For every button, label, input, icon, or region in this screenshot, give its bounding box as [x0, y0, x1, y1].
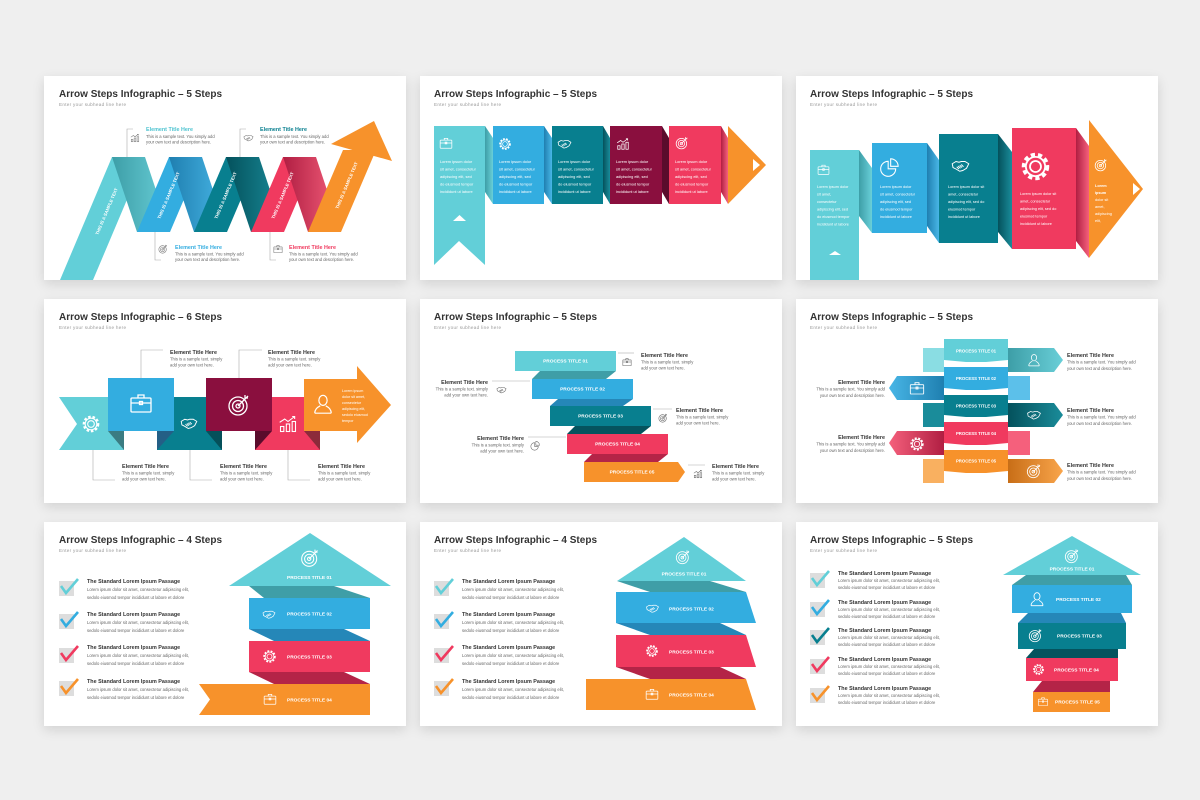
- ribbon steps: sit amet, consectetur: [675, 166, 712, 172]
- title: Arrow Steps Infographic – 5 Steps: [810, 312, 973, 323]
- rising boxes: incididunt ut labore: [1020, 222, 1052, 226]
- title: Arrow Steps Infographic – 5 Steps: [434, 312, 597, 323]
- rising boxes: adipiscing elit, sed do: [1020, 207, 1056, 211]
- checklist: sedolo eiusmod tempor incididunt ut labore et dolore: [838, 614, 936, 619]
- ribbon steps: adipiscing elit, sed: [616, 174, 648, 179]
- checklist: The Standard Lorem Ipsum Passage: [87, 612, 180, 618]
- callouts: add your own text here.: [268, 362, 312, 368]
- callouts: [436, 353, 765, 482]
- callouts: add your own text here.: [712, 476, 756, 482]
- checklist: The Standard Lorem Ipsum Passage: [87, 579, 180, 585]
- callouts: Element Title Here: [318, 464, 365, 470]
- checklist: sedolo eiusmod tempor incididunt ut labore et dolore: [87, 595, 185, 600]
- stacked arrow: PROCESS TITLE 01: [287, 575, 332, 581]
- checklist: Lorem ipsum dolor sit amet, consectetur adipiscing elit,: [87, 653, 189, 658]
- rising boxes: ipsum: [1095, 191, 1107, 195]
- ribbon steps: adipiscing elit, sed: [675, 174, 707, 179]
- six-step arrow: Lorem ipsum: [342, 389, 363, 393]
- stacked slanted arrow: [586, 537, 756, 710]
- ribbon steps: adipiscing elit, sed: [558, 174, 590, 179]
- ribbon steps: Lorem ipsum dolor: [558, 159, 591, 164]
- panel: slide 4 six steps: [44, 299, 406, 503]
- callouts: This is a sample text. You simply add: [1067, 360, 1136, 364]
- callout 3: your own text and description here.: [175, 257, 240, 262]
- callout 4: [270, 232, 358, 262]
- ribbon steps: [434, 126, 766, 265]
- callout 3: [155, 232, 244, 262]
- callouts: your own text and description here.: [820, 393, 885, 398]
- rising boxes: consectetur: [817, 200, 837, 204]
- callouts: This is a sample text. You simply add: [816, 386, 886, 392]
- rising boxes: amet,: [1095, 205, 1104, 209]
- callout 2: Element Title Here: [260, 127, 307, 133]
- callouts: This is a sample text. simply: [170, 356, 223, 362]
- ribbon steps: sit amet, consectetur: [616, 166, 653, 172]
- checklist: Lorem ipsum dolor sit amet, consectetur adipiscing elit,: [462, 587, 564, 592]
- callouts: add your own text here.: [122, 476, 166, 482]
- checklist: The Standard Lorem Ipsum Passage: [462, 679, 555, 685]
- callout 2: [240, 127, 329, 157]
- panel: slide 5 staircase: [420, 299, 782, 503]
- checklist: sedolo eiusmod tempor incididunt ut labore et dolore: [462, 595, 560, 600]
- callouts: This is a sample text. simply: [122, 470, 175, 476]
- pyramid arrow: PROCESS TITLE 01: [1050, 566, 1095, 572]
- panel: slide 3 rising boxes: [796, 76, 1158, 280]
- ribbon steps: adipiscing elit, sed: [499, 174, 531, 179]
- callouts: add your own text here.: [170, 362, 214, 368]
- stacked slanted arrow: PROCESS TITLE 01: [662, 572, 707, 578]
- callouts: add your own text here.: [220, 476, 264, 482]
- title: Arrow Steps Infographic – 6 Steps: [59, 312, 222, 323]
- rising boxes: Lorem ipsum dolor sit: [948, 185, 985, 189]
- rising boxes: eiusmod tempor: [1020, 214, 1048, 218]
- rising boxes: Lorem ipsum dolor: [817, 185, 849, 189]
- callout 2: This is a sample text. You simply add: [260, 134, 329, 139]
- ribbon steps: sit amet, consectetur: [499, 166, 536, 172]
- banners: [889, 339, 1063, 483]
- rising boxes: incididunt ut labore: [948, 215, 980, 219]
- callouts: Element Title Here: [641, 353, 688, 359]
- callouts: This is a sample text. You simply add: [1067, 470, 1136, 474]
- ribbon steps: sit amet, consectetur: [558, 166, 595, 172]
- rising boxes: eiusmod tempor: [948, 208, 976, 212]
- checklist: sedolo eiusmod tempor incididunt ut labore et dolore: [462, 661, 560, 666]
- callouts: This is a sample text. You simply add: [1067, 414, 1136, 420]
- banners: PROCESS TITLE 01: [956, 348, 997, 354]
- checklist: [810, 571, 940, 705]
- stacked arrow: PROCESS TITLE 04: [287, 698, 332, 704]
- ribbon steps: do eiusmod tempor: [616, 182, 650, 186]
- staircase: PROCESS TITLE 03: [578, 414, 623, 420]
- checklist: Lorem ipsum dolor sit amet, consectetur adipiscing elit,: [838, 664, 940, 669]
- panel: slide 1 zigzag arrow: [44, 76, 406, 280]
- subhead: Enter your subhead line here: [59, 548, 126, 553]
- rising boxes: Lorem: [1095, 184, 1107, 188]
- callout 2: your own text and description here.: [260, 140, 325, 144]
- stacked slanted arrow: PROCESS TITLE 03: [669, 650, 714, 656]
- title: Arrow Steps Infographic – 5 Steps: [810, 535, 973, 546]
- rising boxes: sit amet, consectetur: [880, 192, 916, 196]
- rising boxes: adipiscing elit, sed do: [948, 200, 984, 204]
- title: Arrow Steps Infographic – 4 Steps: [59, 535, 222, 546]
- six-step arrow: sedolo eiusmod: [342, 413, 368, 417]
- zigzag arrow: THIS IS A SAMPLE TEXT: [334, 161, 359, 210]
- six-step arrow: [59, 366, 391, 450]
- banners: PROCESS TITLE 05: [956, 458, 997, 464]
- subhead: Enter your subhead line here: [434, 102, 501, 107]
- subhead: Enter your subhead line here: [810, 548, 877, 553]
- checklist: Lorem ipsum dolor sit amet, consectetur adipiscing elit,: [87, 620, 189, 625]
- callouts: This is a sample text. simply: [712, 470, 765, 476]
- rising boxes: amet, consectetur: [1020, 200, 1051, 204]
- checklist: The Standard Lorem Ipsum Passage: [838, 686, 931, 692]
- ribbon steps: Lorem ipsum dolor: [616, 159, 649, 164]
- callouts: add your own text here.: [676, 420, 720, 426]
- callouts: This is a sample text. simply: [676, 414, 729, 420]
- rising boxes: dolor sit: [1095, 198, 1109, 202]
- subhead: Enter your subhead line here: [434, 548, 501, 553]
- checklist: sedolo eiusmod tempor incididunt ut labore et dolore: [838, 700, 936, 705]
- ribbon steps: incididunt ut labore: [616, 189, 649, 194]
- panel: slide 6 central column with banners: [796, 299, 1158, 503]
- subhead: Enter your subhead line here: [434, 325, 501, 330]
- zigzag arrow: THIS IS A SAMPLE TEXT: [156, 171, 181, 220]
- checklist: [434, 579, 564, 700]
- callouts: This is a sample text. simply: [318, 470, 371, 476]
- checklist: Lorem ipsum dolor sit amet, consectetur adipiscing elit,: [87, 687, 189, 692]
- zigzag arrow: THIS IS A SAMPLE TEXT: [213, 171, 238, 220]
- callout 1: Element Title Here: [146, 127, 193, 133]
- panel: slide 7 four steps house: [44, 522, 406, 726]
- checklist: Lorem ipsum dolor sit amet, consectetur adipiscing elit,: [462, 620, 564, 625]
- rising boxes: sit amet,: [817, 192, 831, 196]
- checklist: Lorem ipsum dolor sit amet, consectetur adipiscing elit,: [87, 587, 189, 592]
- callouts: your own text and description here.: [1067, 476, 1132, 481]
- callouts: Element Title Here: [441, 380, 488, 386]
- callout 3: This is a sample text. You simply add: [175, 252, 244, 256]
- staircase: PROCESS TITLE 05: [610, 470, 655, 476]
- banners: PROCESS TITLE 04: [956, 431, 997, 436]
- callouts: Element Title Here: [712, 464, 759, 470]
- callouts: add your own text here.: [480, 448, 524, 454]
- callouts: [93, 350, 371, 482]
- callout 1: [127, 127, 215, 157]
- ribbon steps: do eiusmod tempor: [675, 182, 709, 186]
- panel: slide 9 five steps pyramid: [796, 522, 1158, 726]
- checklist: The Standard Lorem Ipsum Passage: [462, 579, 555, 585]
- callouts: Element Title Here: [477, 436, 524, 442]
- stacked arrow: [199, 533, 391, 715]
- subhead: Enter your subhead line here: [810, 325, 877, 330]
- checklist: sedolo eiusmod tempor incididunt ut labore et dolore: [838, 585, 936, 590]
- ribbon steps: do eiusmod tempor: [558, 182, 592, 186]
- pyramid arrow: PROCESS TITLE 02: [1056, 597, 1101, 603]
- checklist: The Standard Lorem Ipsum Passage: [838, 571, 931, 577]
- ribbon steps: incididunt ut labore: [440, 189, 473, 194]
- rising boxes: adipiscing elit, sed: [880, 200, 911, 204]
- checklist: The Standard Lorem Ipsum Passage: [87, 679, 180, 685]
- callouts: add your own text here.: [444, 392, 488, 398]
- ribbon steps: adipiscing elit, sed: [440, 174, 472, 179]
- callouts: Element Title Here: [268, 350, 315, 356]
- callouts: Element Title Here: [220, 464, 267, 470]
- rising boxes: Lorem ipsum dolor sit: [1020, 192, 1057, 196]
- callout 4: Element Title Here: [289, 245, 336, 251]
- rising boxes: elit,: [1095, 219, 1101, 223]
- subhead: Enter your subhead line here: [59, 102, 126, 107]
- title: Arrow Steps Infographic – 4 Steps: [434, 535, 597, 546]
- callouts: Element Title Here: [838, 435, 885, 441]
- ribbon steps: Lorem ipsum dolor: [499, 159, 532, 164]
- callouts: This is a sample text. You simply add: [816, 442, 886, 446]
- rising boxes: adipiscing elit, sed: [817, 208, 848, 212]
- banners: PROCESS TITLE 02: [956, 376, 997, 381]
- stacked slanted arrow: PROCESS TITLE 04: [669, 692, 714, 698]
- background shadows: [44, 80, 1158, 730]
- six-step arrow: tempor: [342, 419, 354, 423]
- title: Arrow Steps Infographic – 5 Steps: [59, 89, 222, 100]
- checklist: Lorem ipsum dolor sit amet, consectetur adipiscing elit,: [838, 607, 940, 612]
- callout 4: This is a sample text. You simply add: [289, 252, 358, 256]
- zigzag arrow: [60, 121, 392, 280]
- rising boxes: [810, 120, 1143, 280]
- six-step arrow: adipiscing elit,: [342, 407, 365, 411]
- staircase: PROCESS TITLE 02: [560, 387, 605, 393]
- zigzag arrow: THIS IS A SAMPLE TEXT: [94, 187, 119, 236]
- checklist: sedolo eiusmod tempor incididunt ut labore et dolore: [462, 695, 560, 700]
- checklist: Lorem ipsum dolor sit amet, consectetur adipiscing elit,: [462, 653, 564, 658]
- checklist: sedolo eiusmod tempor incididunt ut labore et dolore: [87, 628, 185, 633]
- staircase: PROCESS TITLE 04: [595, 442, 640, 448]
- callout 1: your own text and description here.: [146, 140, 211, 144]
- ribbon steps: Lorem ipsum dolor: [675, 159, 708, 164]
- ribbon steps: sit amet, consectetur: [440, 166, 477, 172]
- checklist: The Standard Lorem Ipsum Passage: [838, 600, 931, 606]
- callout 4: your own text and description here.: [289, 257, 354, 262]
- rising boxes: amet, consectetur: [948, 192, 979, 196]
- pyramid arrow: PROCESS TITLE 03: [1057, 634, 1102, 640]
- pyramid arrow: PROCESS TITLE 05: [1055, 700, 1100, 706]
- callouts: Element Title Here: [170, 350, 217, 356]
- checklist: The Standard Lorem Ipsum Passage: [838, 628, 931, 634]
- checklist: The Standard Lorem Ipsum Passage: [462, 612, 555, 618]
- callout 1: This is a sample text. You simply add: [146, 134, 215, 139]
- checklist: The Standard Lorem Ipsum Passage: [838, 657, 931, 663]
- pyramid arrow: PROCESS TITLE 04: [1054, 668, 1099, 674]
- stacked arrow: PROCESS TITLE 03: [287, 654, 332, 660]
- callouts: add your own text here.: [641, 366, 685, 370]
- ribbon steps: do eiusmod tempor: [499, 182, 533, 186]
- callouts: your own text and description here.: [820, 448, 885, 453]
- panel: slide 2 ribbon steps: [420, 76, 782, 280]
- ribbon steps: incididunt ut labore: [675, 189, 708, 194]
- checklist: sedolo eiusmod tempor incididunt ut labore et dolore: [87, 661, 185, 666]
- checklist: Lorem ipsum dolor sit amet, consectetur adipiscing elit,: [838, 693, 940, 698]
- callouts: add your own text here.: [318, 476, 362, 482]
- checklist: sedolo eiusmod tempor incididunt ut labore et dolore: [462, 628, 560, 633]
- ribbon steps: incididunt ut labore: [499, 189, 532, 194]
- checklist: sedolo eiusmod tempor incididunt ut labore et dolore: [838, 642, 936, 647]
- callouts: This is a sample text. simply: [436, 386, 489, 392]
- callouts: Element Title Here: [1067, 463, 1114, 469]
- callouts: your own text and description here.: [1067, 366, 1132, 371]
- pyramid arrow: [1003, 536, 1141, 712]
- callouts: This is a sample text. simply: [472, 442, 525, 448]
- callouts: Element Title Here: [122, 464, 169, 470]
- checklist: The Standard Lorem Ipsum Passage: [462, 645, 555, 651]
- ribbon steps: do eiusmod tempor: [440, 182, 474, 186]
- stacked arrow: PROCESS TITLE 02: [287, 612, 332, 618]
- rising boxes: Lorem ipsum dolor: [880, 185, 912, 189]
- rising boxes: do eiusmod tempor: [817, 215, 850, 219]
- staircase: PROCESS TITLE 01: [543, 359, 588, 365]
- callouts: Element Title Here: [838, 380, 885, 386]
- checklist: Lorem ipsum dolor sit amet, consectetur adipiscing elit,: [462, 687, 564, 692]
- title: Arrow Steps Infographic – 5 Steps: [810, 89, 973, 100]
- title: Arrow Steps Infographic – 5 Steps: [434, 89, 597, 100]
- panel: slide 8 four steps slanted: [420, 522, 782, 726]
- callouts: This is a sample text. simply: [220, 470, 273, 476]
- subhead: Enter your subhead line here: [59, 325, 126, 330]
- callouts: [816, 353, 1136, 481]
- stacked slanted arrow: PROCESS TITLE 02: [669, 606, 714, 612]
- checklist: Lorem ipsum dolor sit amet, consectetur adipiscing elit,: [838, 635, 940, 640]
- rising boxes: incididunt ut labore: [817, 222, 849, 226]
- callouts: your own text and description here.: [1067, 421, 1132, 426]
- zigzag arrow: THIS IS A SAMPLE TEXT: [270, 171, 295, 220]
- callouts: This is a sample text. simply: [641, 360, 694, 364]
- checklist: sedolo eiusmod tempor incididunt ut labore et dolore: [87, 695, 185, 700]
- rising boxes: do eiusmod tempor: [880, 208, 913, 212]
- checklist: Lorem ipsum dolor sit amet, consectetur adipiscing elit,: [838, 578, 940, 583]
- checklist: The Standard Lorem Ipsum Passage: [87, 645, 180, 651]
- ribbon steps: incididunt ut labore: [558, 189, 591, 194]
- callouts: Element Title Here: [1067, 353, 1114, 359]
- rising boxes: adipiscing: [1095, 212, 1112, 216]
- six-step arrow: dolor sit amet,: [342, 395, 365, 399]
- callouts: Element Title Here: [676, 408, 723, 414]
- callouts: This is a sample text. simply: [268, 356, 321, 362]
- subhead: Enter your subhead line here: [810, 102, 877, 107]
- banners: PROCESS TITLE 03: [956, 404, 997, 408]
- ribbon steps: Lorem ipsum dolor: [440, 159, 473, 164]
- six-step arrow: consectetur: [342, 401, 362, 405]
- staircase: [515, 351, 685, 482]
- rising boxes: incididunt ut labore: [880, 215, 912, 219]
- callout 3: Element Title Here: [175, 245, 222, 251]
- callouts: Element Title Here: [1067, 408, 1114, 414]
- checklist: sedolo eiusmod tempor incididunt ut labore et dolore: [838, 671, 936, 676]
- checklist: [59, 579, 189, 700]
